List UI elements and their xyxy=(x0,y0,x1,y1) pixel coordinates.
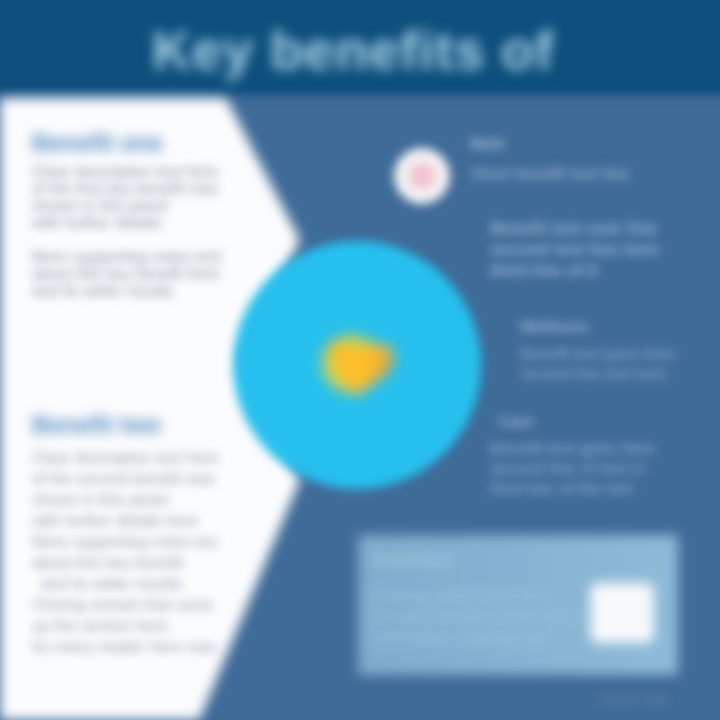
text block: right item 1 xyxy=(466,134,632,184)
text block: right item 3 xyxy=(517,317,676,383)
icon: small pink circle xyxy=(386,140,458,212)
text block: right item 4: Care xyxy=(498,414,534,431)
text block: right item 3: Benefit text goes here xyxy=(520,346,676,363)
text block: lower: and its wider results xyxy=(41,576,182,593)
text block: right item 1: Item xyxy=(470,134,505,153)
text block: upper xyxy=(28,162,224,301)
text block: right item 4 xyxy=(488,413,656,498)
text block: upper: of the first key benefit now xyxy=(32,181,218,198)
callout text: and further reading now xyxy=(370,628,550,647)
text block: lower xyxy=(29,448,221,657)
text block: upper: and its wider results xyxy=(32,283,173,300)
text block: right item 3: second line text here xyxy=(520,366,668,383)
title: Key benefits of xyxy=(152,21,554,81)
text block: upper: about this key benefit here xyxy=(32,266,220,283)
footer note: source note xyxy=(600,691,668,706)
text block: right item 1: Short benefit text line xyxy=(470,164,630,183)
callout heading: Summary xyxy=(370,550,452,570)
text block: lower: up the section here xyxy=(32,618,168,635)
panel: upper benefit text xyxy=(24,126,224,301)
text block: right item 2: third line of it xyxy=(490,261,598,280)
text block: upper: Clear description text here xyxy=(32,164,219,181)
callout text: Closing callout text on it xyxy=(370,586,550,605)
callout text: the key benefits given here xyxy=(370,607,573,626)
text block: lower: Closing remark that sums xyxy=(32,597,213,614)
panel: lower benefit text xyxy=(24,408,221,657)
text block: right item 3: Wellness xyxy=(520,319,589,336)
text block: lower: of the second benefit now xyxy=(32,471,214,488)
icon: central yellow heart xyxy=(312,324,404,405)
text block: upper: shown in this panel xyxy=(32,198,168,215)
text block: lower: about this key benefit xyxy=(32,555,183,572)
heading: lower: Benefit two xyxy=(32,412,161,439)
text block: right item 2 xyxy=(486,218,662,280)
central circle xyxy=(233,241,481,489)
text block: lower: for every reader here now xyxy=(32,639,215,656)
panel: bottom callout xyxy=(358,535,678,675)
text block: right item 4: second line of text in xyxy=(490,459,645,478)
text block: right item 4: Benefit text goes here xyxy=(490,439,655,458)
text block: upper: with further details xyxy=(32,215,162,232)
icon: white square xyxy=(590,583,654,643)
text block: lower: More supporting notes too xyxy=(32,534,218,551)
callout text xyxy=(370,585,573,648)
text block: lower: Clear description text here xyxy=(32,450,219,467)
text block: right item 4: third line of the text xyxy=(490,479,634,498)
text block: right item 2: Benefit text over line xyxy=(490,219,657,238)
text block: lower: with further details here xyxy=(32,513,198,530)
header band xyxy=(0,0,720,95)
text block: upper: More supporting notes text xyxy=(32,249,221,266)
text block: lower: shown in this panel xyxy=(32,492,168,509)
text block: right item 2: second text line here xyxy=(490,240,659,259)
heading: upper: Benefit one xyxy=(32,130,163,157)
